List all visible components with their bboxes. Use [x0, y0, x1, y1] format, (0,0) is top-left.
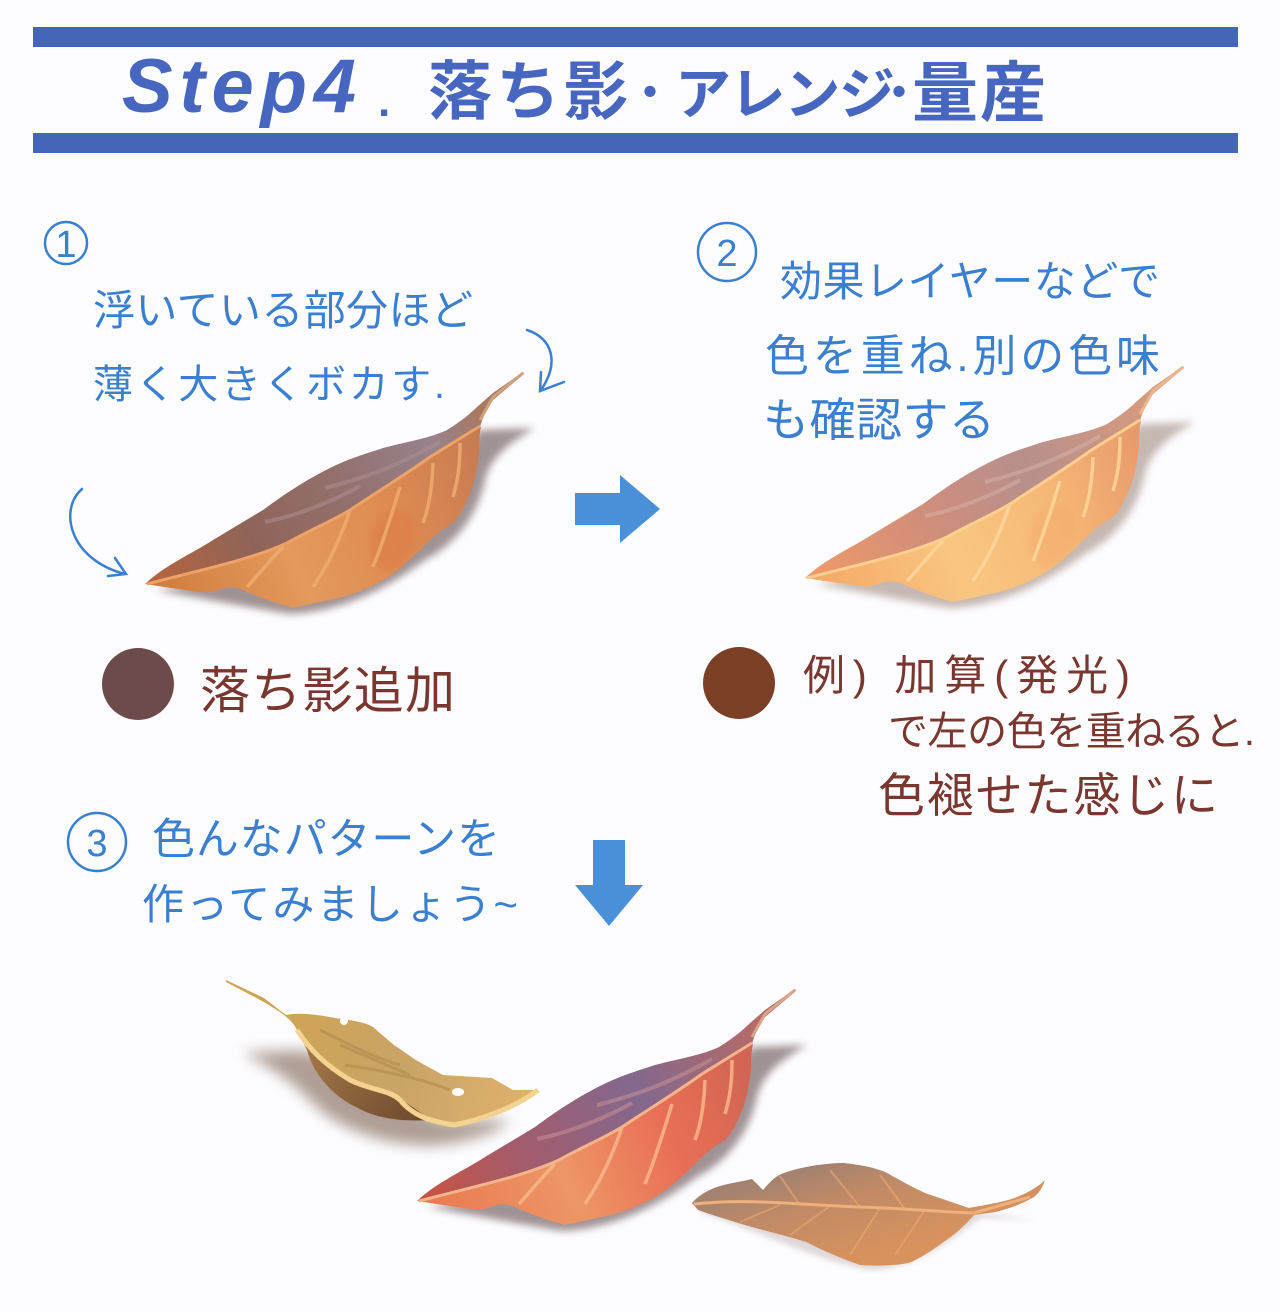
step 1 number [45, 222, 87, 266]
title banner: 量産 [912, 56, 1046, 130]
step 3 number [68, 813, 126, 871]
title banner: 落ち影 [428, 56, 628, 128]
step 1 number: 1 [55, 224, 77, 266]
step 3 number: 3 [86, 823, 108, 865]
leaf: large red and purple [417, 989, 807, 1231]
step 1 note: 薄く大きくボカす. [93, 363, 445, 407]
step 1 note [93, 287, 473, 407]
step 3 note: 作ってみましょう~ [142, 881, 518, 928]
colour swatch: additive [703, 647, 775, 719]
additive note: で左の色を重ねると. [888, 710, 1255, 754]
title banner: ・ [877, 69, 921, 118]
additive note: 色褪せた感じに [878, 769, 1218, 822]
leaf 2 lighter colour version [805, 366, 1195, 608]
title banner: ・ [628, 69, 672, 118]
leaf 1 with cast shadow [145, 372, 535, 614]
title banner: Step4 [122, 44, 356, 129]
annotation arrow: left [70, 489, 126, 576]
step 2 note: も確認する [763, 394, 995, 446]
step 2 note: 色を重ね.別の色味 [765, 332, 1160, 381]
title banner: アレンジ [675, 63, 895, 126]
step 2 note: 効果レイヤーなどで [780, 258, 1160, 305]
label: drop shadow added: 落ち影追加 [200, 663, 455, 719]
colour swatch: drop shadow [102, 648, 174, 720]
additive note: 例) 加算(発光) [803, 652, 1130, 699]
step 2 number [698, 223, 756, 281]
big down arrow [575, 840, 643, 926]
title banner [33, 27, 1238, 153]
big right arrow [575, 475, 660, 543]
step 3 note: 色んなパターンを [152, 816, 500, 864]
title banner: . [378, 77, 390, 126]
annotation arrow: top right [527, 330, 564, 391]
step 1 note: 浮いている部分ほど [93, 287, 473, 334]
step 3 note [142, 816, 518, 928]
step 2 note [763, 258, 1160, 446]
step 2 number: 2 [716, 233, 738, 275]
leaf: yellow curled [226, 980, 538, 1145]
leaf: brown flat [692, 1163, 1045, 1270]
additive note [803, 652, 1255, 822]
